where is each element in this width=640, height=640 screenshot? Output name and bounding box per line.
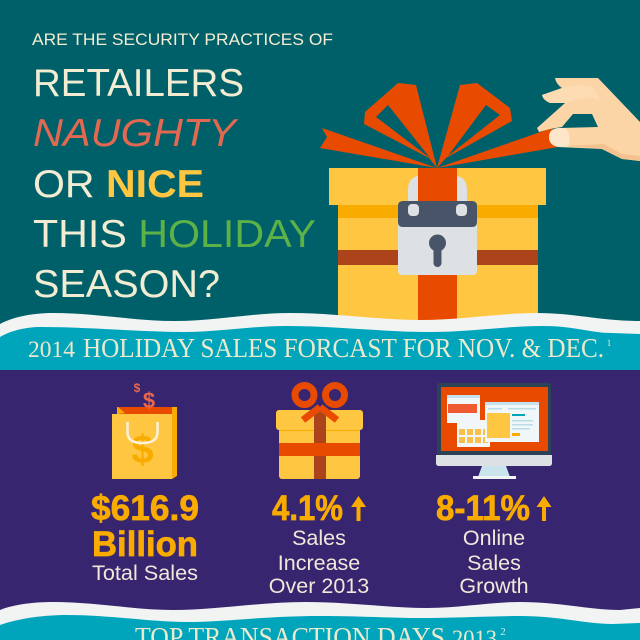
label: sales increase over 2013: Sales (292, 526, 346, 550)
white wave (0, 313, 640, 345)
heading: top transaction days: 2 (500, 626, 506, 638)
title block (32, 30, 333, 306)
heading: 2014 holiday sales forecast: 1 (607, 338, 611, 348)
panel: top transaction days band (0, 615, 640, 640)
stat column: online sales (436, 383, 552, 598)
padlock (398, 176, 477, 275)
browser window: product page (485, 402, 539, 442)
icon: gift (276, 386, 363, 479)
title: retailers: RETAILERS (33, 62, 244, 105)
stat: 8-11%: 8-11% (436, 489, 530, 528)
label: online sales growth: Growth (459, 574, 529, 598)
title: eyebrow: ARE THE SECURITY PRACTICES OF (32, 30, 333, 49)
horizontal ribbon (338, 250, 538, 265)
label: total sales: Total Sales (92, 562, 198, 585)
white wave bottom (0, 602, 640, 640)
browser window: product grid (457, 420, 490, 447)
floating dollar large: $ (143, 388, 155, 413)
label: online sales growth (459, 526, 529, 598)
heading: 2014 holiday sales forecast: HOLIDAY SALES FORCAST FOR NOV. & DEC. (83, 333, 604, 363)
stat column: sales increase (269, 386, 369, 598)
stat: 616.9: $616.9 (91, 489, 199, 528)
icon: desktop monitor (436, 383, 552, 479)
icon: hand pulling ribbon (537, 78, 640, 161)
bag handle (128, 422, 158, 443)
title: or nice: OR NICE (33, 163, 204, 206)
label: online sales growth: Sales (467, 551, 521, 575)
floating dollar small: $ (134, 381, 141, 395)
gift box shadow band (338, 205, 538, 218)
browser window: left (447, 395, 480, 423)
panel: forecast section background (0, 368, 640, 630)
gift box body (338, 200, 538, 325)
title: this holiday: THIS HOLIDAY (33, 213, 316, 256)
label: sales increase over 2013: Over 2013 (269, 574, 369, 598)
dollar sign on bag: $ (131, 428, 154, 472)
title: naughty: NAUGHTY (33, 112, 239, 155)
arrow: up (536, 496, 552, 521)
gift bow (295, 386, 344, 420)
label: sales increase over 2013: Increase (278, 551, 360, 575)
label: online sales growth: Online (463, 526, 525, 550)
heading: 2014 holiday sales forecast: 2014 (28, 337, 76, 362)
stat: 4.1%: 4.1% (272, 489, 343, 528)
stat: billion: Billion (92, 525, 198, 564)
gift box lid (329, 168, 546, 205)
icon: shopping bag (112, 381, 177, 479)
icon: locked gift box (320, 83, 558, 325)
label: sales increase over 2013 (269, 526, 369, 598)
panel: header background (0, 0, 640, 345)
vertical ribbon (418, 168, 457, 325)
title: season: SEASON? (33, 263, 220, 306)
panel: forecast heading band (0, 326, 640, 370)
arrow: up (351, 496, 366, 521)
stat column: total sales (91, 381, 199, 585)
ribbon bow (320, 83, 558, 168)
